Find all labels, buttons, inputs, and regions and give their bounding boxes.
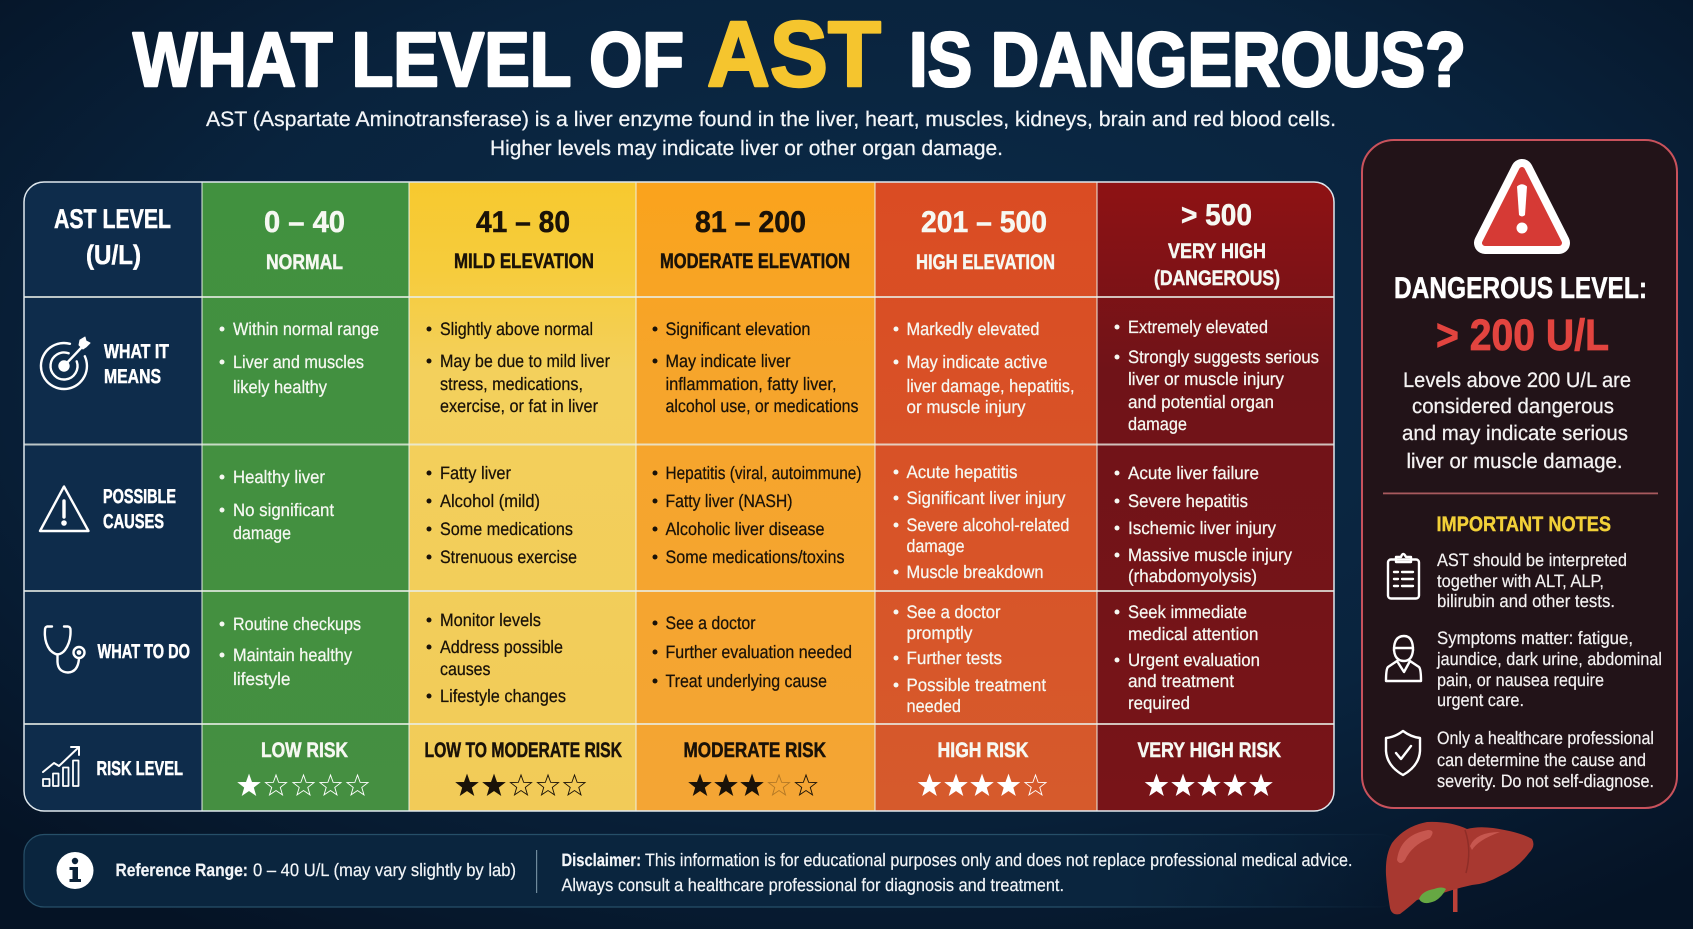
header: high elevation: HIGH ELEVATION <box>916 251 1055 274</box>
cell: causes mild <box>426 463 577 567</box>
cell: causes very high: Massive muscle injury <box>1128 545 1292 565</box>
cell: action very high: Seek immediate <box>1128 602 1247 622</box>
cell: means normal: likely healthy <box>233 377 327 397</box>
heading: important notes: IMPORTANT NOTES <box>1436 513 1611 536</box>
cell: action very high: and treatment <box>1128 671 1234 691</box>
cell: action high <box>894 602 1046 716</box>
note: interpret with other tests <box>1388 550 1627 611</box>
rating: 5 of 5 stars <box>1146 775 1271 795</box>
cell: causes high: Severe alcohol-related <box>906 515 1070 535</box>
panel: dangerous level <box>1362 140 1677 808</box>
risk: high: HIGH RISK <box>938 739 1028 762</box>
header: AST level: AST LEVEL <box>54 204 171 234</box>
cell: means mild: stress, medications, <box>440 374 583 394</box>
note: symptoms matter <box>1386 628 1662 710</box>
header: normal: NORMAL <box>266 251 343 274</box>
cell: causes very high: Severe hepatitis <box>1128 491 1248 511</box>
header: very high <box>1154 199 1280 290</box>
cell: means very high: Strongly suggests serious <box>1128 347 1319 367</box>
cell: means high: or muscle injury <box>906 397 1026 417</box>
row label: what to do <box>45 626 190 672</box>
icon: shield check <box>1386 731 1420 775</box>
cell: action normal: lifestyle <box>233 669 290 689</box>
header: AST level <box>54 204 171 270</box>
cell: action high: needed <box>906 696 961 716</box>
header: mild elevation: 41 – 80 <box>476 206 570 239</box>
disclaimer: Always consult a healthcare professional for diagnosis and treatment. <box>562 875 1064 895</box>
cell: means moderate: alcohol use, or medications <box>666 396 858 416</box>
cell: means very high: liver or muscle injury <box>1128 369 1284 389</box>
cell: causes high: Acute hepatitis <box>906 462 1018 482</box>
cell: causes moderate: Hepatitis (viral, autoimmune) <box>666 463 862 483</box>
cell: action mild: Address possible <box>440 637 563 657</box>
risk: moderate: MODERATE RISK <box>684 739 826 762</box>
title <box>133 2 1466 106</box>
row label: what it means <box>41 337 169 389</box>
cell: causes high: Significant liver injury <box>906 488 1066 508</box>
header: moderate elevation <box>660 206 850 273</box>
row label: possible causes: POSSIBLE <box>103 486 176 508</box>
cell: action very high: medical attention <box>1128 624 1258 644</box>
header: normal: 0 – 40 <box>264 206 345 239</box>
cell: causes high: Muscle breakdown <box>906 562 1044 582</box>
icon: warning triangle <box>40 486 88 531</box>
note: interpret with other tests: together with ALT, ALP, <box>1437 571 1604 591</box>
cell: means moderate: inflammation, fatty liver, <box>666 374 836 394</box>
cell: means very high: damage <box>1128 414 1187 434</box>
note: symptoms matter: Symptoms matter: fatigue, <box>1437 628 1633 648</box>
cell: causes moderate: Fatty liver (NASH) <box>666 491 792 511</box>
cell: causes normal: Healthy liver <box>233 467 325 487</box>
cell: causes high: damage <box>906 536 964 556</box>
cell: means mild: Slightly above normal <box>440 319 593 339</box>
cell: causes very high <box>1114 463 1292 586</box>
cell: causes mild: Alcohol (mild) <box>440 491 540 511</box>
disclaimer: This information is for educational purposes only and does not replace professional medical advice. <box>645 850 1352 870</box>
disclaimer <box>562 850 1352 895</box>
reference range: Reference Range: <box>116 860 248 880</box>
text: danger explanation <box>1402 369 1631 473</box>
table: AST levels <box>24 182 1334 811</box>
icon: stethoscope <box>45 626 84 672</box>
risk: low to moderate <box>424 739 622 795</box>
risk: moderate <box>684 739 826 795</box>
row label: risk level: RISK LEVEL <box>96 758 183 780</box>
text: danger explanation: Levels above 200 U/L are <box>1403 369 1631 392</box>
header: high elevation <box>916 206 1055 274</box>
cell: causes high <box>894 462 1070 582</box>
cell: action moderate <box>652 613 852 691</box>
risk: high <box>919 739 1046 795</box>
text: danger explanation: considered dangerous <box>1412 395 1614 418</box>
note: healthcare professional: severity. Do not self-diagnose. <box>1437 771 1654 791</box>
cell: means mild: May be due to mild liver <box>440 351 610 371</box>
cell: causes very high: Acute liver failure <box>1128 463 1259 483</box>
note: symptoms matter: pain, or nausea require <box>1437 670 1604 690</box>
cell: action normal: Maintain healthy <box>233 645 352 665</box>
header: moderate elevation: MODERATE ELEVATION <box>660 250 850 273</box>
cell: action mild: Lifestyle changes <box>440 686 566 706</box>
cell: causes normal <box>220 467 334 543</box>
header: moderate elevation: 81 – 200 <box>695 206 806 239</box>
note: symptoms matter: urgent care. <box>1437 690 1524 710</box>
risk: low: LOW RISK <box>261 739 348 762</box>
header: very high: (DANGEROUS) <box>1154 267 1280 290</box>
icon: info <box>56 852 94 889</box>
title: IS DANGEROUS? <box>909 17 1466 103</box>
cell: action high: See a doctor <box>906 602 1000 622</box>
subtitle: Higher levels may indicate liver or other organ damage. <box>490 137 1003 160</box>
cell: action mild <box>426 610 566 706</box>
cell: action moderate: See a doctor <box>666 613 756 633</box>
cell: means normal: Liver and muscles <box>233 352 364 372</box>
cell: means very high: and potential organ <box>1128 392 1274 412</box>
cell: means moderate: May indicate liver <box>666 351 790 371</box>
rating: 4 of 5 stars <box>919 775 1046 795</box>
risk: low <box>239 739 368 795</box>
icon: clipboard <box>1388 554 1419 598</box>
cell: causes mild: Some medications <box>440 519 573 539</box>
note: interpret with other tests: bilirubin and other tests. <box>1437 591 1615 611</box>
cell: means moderate: Significant elevation <box>666 319 810 339</box>
rating: 2 of 5 stars <box>457 775 585 795</box>
row label: risk level <box>43 747 183 786</box>
value: over 200 U/L: > 200 U/L <box>1436 311 1609 360</box>
cell: means normal: Within normal range <box>233 319 379 339</box>
cell: causes moderate <box>652 463 862 567</box>
reference range <box>116 860 516 880</box>
note: interpret with other tests: AST should be interpreted <box>1437 550 1627 570</box>
icon: liver <box>1386 822 1533 914</box>
cell: means mild <box>426 319 610 416</box>
subtitle <box>206 108 1336 160</box>
cell: action high: Further tests <box>906 648 1002 668</box>
cell: causes mild: Fatty liver <box>440 463 511 483</box>
row label: possible causes <box>40 486 176 533</box>
cell: action moderate: Further evaluation needed <box>666 642 852 662</box>
rating: 1 of 5 stars <box>239 775 368 795</box>
cell: action mild: Monitor levels <box>440 610 541 630</box>
row label: what it means: MEANS <box>104 366 161 388</box>
header: very high: VERY HIGH <box>1168 240 1266 263</box>
disclaimer: Disclaimer: <box>562 850 641 870</box>
header: AST level: (U/L) <box>86 240 141 270</box>
cell: causes very high: (rhabdomyolysis) <box>1128 566 1257 586</box>
cell: action high: promptly <box>906 623 972 643</box>
header: mild elevation: MILD ELEVATION <box>454 250 594 273</box>
icon: rising chart <box>43 747 79 786</box>
cell: means high <box>894 319 1074 417</box>
subtitle: AST (Aspartate Aminotransferase) is a liver enzyme found in the liver, heart, muscles, kidneys, brain and red blood cells. <box>206 108 1336 131</box>
cell: means very high: Extremely elevated <box>1128 317 1268 337</box>
reference range: 0 – 40 U/L (may vary slightly by lab) <box>253 860 516 880</box>
note: healthcare professional: Only a healthcare professional <box>1437 728 1654 748</box>
row label: what to do: WHAT TO DO <box>98 641 190 663</box>
cell: action mild: causes <box>440 659 490 679</box>
note: healthcare professional <box>1386 728 1654 791</box>
cell: causes moderate: Some medications/toxins <box>666 547 844 567</box>
cell: means high: liver damage, hepatitis, <box>906 376 1074 396</box>
title: AST <box>707 2 881 106</box>
row label: possible causes: CAUSES <box>103 511 164 533</box>
cell: causes mild: Strenuous exercise <box>440 547 577 567</box>
cell: action very high: Urgent evaluation <box>1128 650 1260 670</box>
cell: means mild: exercise, or fat in liver <box>440 396 598 416</box>
cell: means high: May indicate active <box>906 352 1048 372</box>
table column backgrounds <box>24 182 1334 811</box>
cell: causes normal: No significant <box>233 500 334 520</box>
risk: very high <box>1138 739 1281 795</box>
icon: large warning triangle <box>1485 170 1559 243</box>
icon: target <box>41 337 90 389</box>
cell: means very high <box>1114 317 1319 434</box>
cell: means high: Markedly elevated <box>906 319 1040 339</box>
row label: what it means: WHAT IT <box>104 341 169 363</box>
risk: very high: VERY HIGH RISK <box>1138 739 1281 762</box>
note: symptoms matter: jaundice, dark urine, abdominal <box>1436 649 1662 669</box>
header: mild elevation <box>454 206 594 273</box>
cell: action normal: Routine checkups <box>233 614 361 634</box>
header: high elevation: 201 – 500 <box>921 206 1047 239</box>
rating: 3 of 5 stars <box>690 775 816 795</box>
icon: doctor <box>1386 636 1421 681</box>
cell: action moderate: Treat underlying cause <box>666 671 827 691</box>
cell: means moderate <box>652 319 858 416</box>
header: normal <box>264 206 345 274</box>
cell: causes moderate: Alcoholic liver disease <box>666 519 824 539</box>
cell: action very high <box>1114 602 1260 713</box>
header: very high: > 500 <box>1181 199 1252 232</box>
note: healthcare professional: can determine the cause and <box>1437 750 1646 770</box>
footer bar <box>24 834 1400 907</box>
cell: action normal <box>220 614 361 689</box>
cell: action high: Possible treatment <box>906 675 1046 695</box>
risk: low to moderate: LOW TO MODERATE RISK <box>424 739 622 762</box>
title: WHAT LEVEL OF <box>133 17 684 103</box>
cell: causes normal: damage <box>233 523 291 543</box>
cell: action very high: required <box>1128 693 1190 713</box>
text: danger explanation: liver or muscle damage. <box>1406 450 1622 473</box>
cell: causes very high: Ischemic liver injury <box>1128 518 1276 538</box>
text: danger explanation: and may indicate serious <box>1402 422 1628 445</box>
cell: means normal <box>220 319 379 397</box>
